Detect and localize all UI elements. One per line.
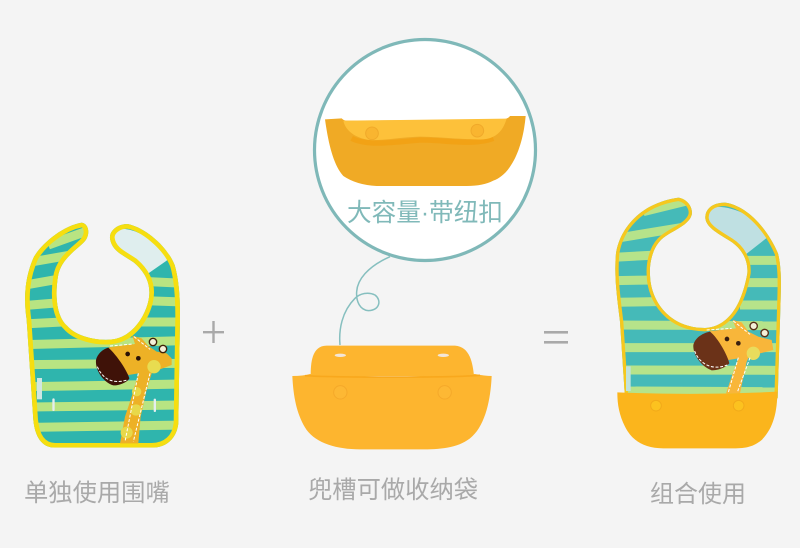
- close-up body: [325, 116, 526, 186]
- bib fabric: teal and green stripes: [610, 195, 783, 402]
- snap holes: [335, 354, 449, 357]
- equals sign: [544, 331, 568, 344]
- velcro patch: [708, 207, 768, 255]
- yellow binding: [615, 198, 781, 398]
- fabric tag and snaps: [37, 378, 156, 412]
- giraffe appliqué: [96, 336, 172, 443]
- circle caption: 大容量·带纽扣: [347, 199, 503, 227]
- pocket: [617, 392, 777, 448]
- bib fabric: teal and green stripes: [20, 220, 187, 450]
- snap buttons: [651, 400, 744, 411]
- pocket front: [292, 374, 492, 449]
- giraffe appliqué: [693, 320, 773, 393]
- yellow binding: [25, 223, 180, 448]
- plus sign: [203, 321, 224, 343]
- silicone pocket: [292, 346, 492, 449]
- connector squiggle: [340, 257, 390, 345]
- caption: pocket: 兜槽可做收纳袋: [308, 477, 478, 504]
- caption: bib alone: 单独使用围嘴: [24, 480, 170, 507]
- crease: [352, 138, 493, 143]
- snap buttons: [334, 386, 451, 399]
- caption: combined: 组合使用: [650, 481, 746, 508]
- close-up buttons: [366, 124, 484, 140]
- fabric tag: [626, 366, 631, 391]
- zoom circle: [314, 40, 536, 260]
- close-up flap: [343, 119, 507, 140]
- velcro patch: [113, 229, 170, 273]
- pocket close-up: [325, 116, 526, 186]
- pocket back flap: [311, 346, 474, 376]
- bib with pocket: [610, 195, 783, 448]
- bib alone: [20, 220, 187, 450]
